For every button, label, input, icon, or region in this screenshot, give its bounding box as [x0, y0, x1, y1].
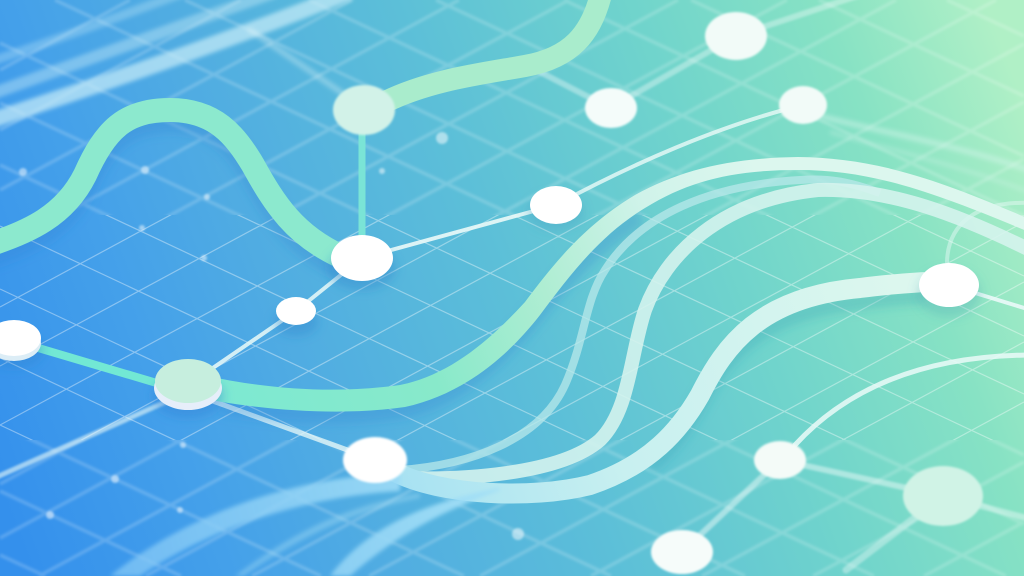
middle pale flow curve [400, 190, 1024, 478]
node: lower right large green [903, 466, 983, 526]
node: lower right small [754, 441, 806, 479]
bottom blurred blue ribbons [110, 473, 500, 576]
node: right [917, 263, 981, 317]
top-right faint bands [820, 116, 1024, 196]
node: green lower left [152, 359, 224, 418]
node: left edge [0, 320, 44, 368]
left green curve [0, 110, 340, 256]
node: top middle [585, 88, 637, 128]
node: bottom center [343, 437, 407, 483]
vertical teal connector [358, 130, 366, 240]
band shadows [0, 122, 925, 466]
node: green top [333, 85, 395, 135]
teal segment at left [35, 347, 160, 384]
node: center right [528, 186, 584, 231]
node: top right large [705, 12, 767, 60]
main green-to-white flow band [190, 157, 1024, 412]
node: top right small [779, 86, 827, 124]
node: bottom [651, 530, 713, 574]
thin pale flow curve [400, 180, 880, 470]
top green curve [385, 0, 602, 102]
lower pale flow band [395, 282, 925, 494]
blurred top-left ribbons [0, 0, 350, 124]
grid intersection glints [19, 132, 524, 540]
node: small center [274, 297, 318, 336]
node: central large [328, 235, 396, 290]
